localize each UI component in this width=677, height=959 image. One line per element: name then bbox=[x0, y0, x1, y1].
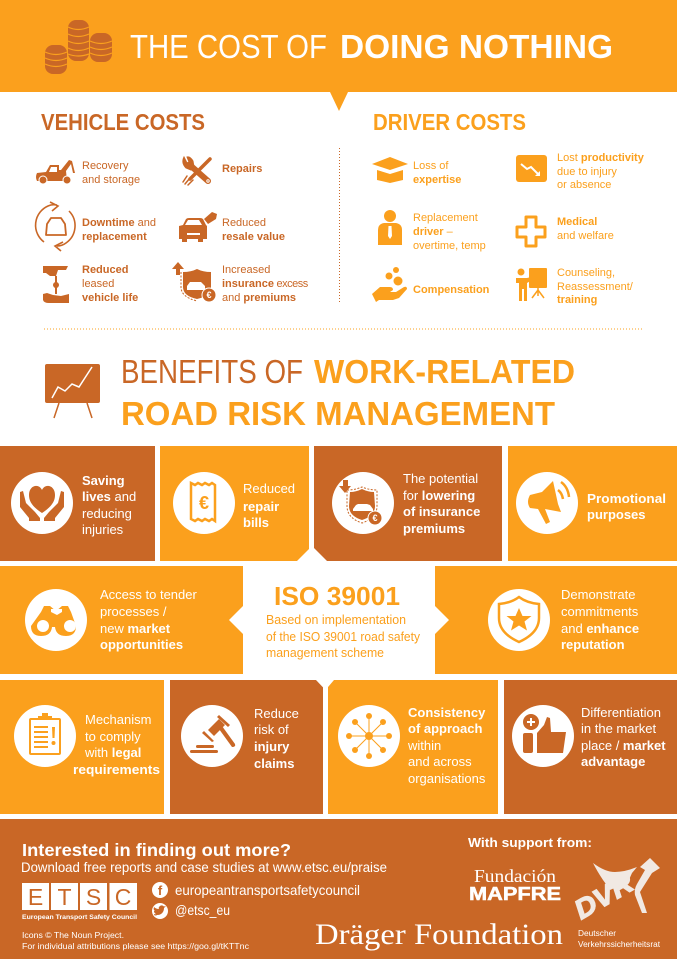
text: mechanism legal requirements: with bbox=[84, 745, 112, 760]
text: demonstrate commitments: reputation bbox=[561, 637, 625, 652]
logo: Fundación MAPFRE: MAPFRE bbox=[469, 884, 561, 904]
text: recovery and storage: Recovery bbox=[82, 160, 129, 172]
logo: ETSC: C bbox=[115, 884, 131, 910]
text: downtime and replacement: Downtime bbox=[82, 217, 135, 229]
logo: ETSC: E bbox=[28, 884, 43, 910]
text: demonstrate commitments: Demonstrate bbox=[561, 587, 635, 602]
text: medical and welfare: and welfare bbox=[557, 230, 614, 242]
text: replacement driver: overtime, temp bbox=[413, 240, 486, 252]
heading: benefits of work-related road risk management: BENEFITS OF bbox=[121, 353, 303, 390]
text: reduced leased vehicle life: Reduced bbox=[82, 264, 128, 276]
tile: demonstrate commitments bbox=[435, 566, 677, 674]
logo: Fundación MAPFRE: Fundación bbox=[474, 866, 556, 886]
text: demonstrate commitments: and bbox=[561, 621, 586, 636]
tile: differentiation market advantage bbox=[504, 680, 677, 814]
heading: benefits of work-related road risk management bbox=[121, 353, 575, 432]
tile: mechanism legal bbox=[0, 680, 164, 814]
text: potential lowering insurance premiums: for bbox=[403, 488, 422, 503]
icon: hand with coins bbox=[372, 267, 407, 302]
text: access to tender: processes / bbox=[100, 604, 167, 619]
panel: ISO 39001 bbox=[266, 581, 421, 660]
text: potential lowering insurance premiums: of insurance bbox=[403, 504, 480, 519]
text: icon attributions: Icons © The Noun Project. bbox=[22, 931, 124, 940]
text: based on implementation: of the ISO 39001 road safety bbox=[266, 630, 421, 644]
text: loss of expertise: expertise bbox=[413, 174, 461, 186]
logo: ETSC: S bbox=[86, 884, 101, 910]
text: facebook handle: europeantransportsafetycouncil bbox=[175, 882, 360, 898]
heading: benefits of work-related road risk management: WORK-RELATED bbox=[314, 353, 575, 390]
text: lost productivity: or absence bbox=[557, 179, 611, 191]
text: lost productivity: productivity bbox=[581, 152, 645, 164]
logo: DVR: Deutscher bbox=[578, 928, 616, 938]
text: promotional purposes: purposes bbox=[587, 507, 646, 522]
icon: facebook: f bbox=[158, 883, 163, 898]
text: lost productivity: due to injury bbox=[557, 166, 617, 178]
text: potential lowering insurance premiums: The potential bbox=[403, 471, 478, 486]
text: icon attributions: For individual attributions please see https://goo.gl/tKTTnc bbox=[22, 942, 249, 951]
icon: replacement cycle bbox=[36, 202, 75, 251]
text: lost productivity: Lost bbox=[557, 152, 581, 164]
text: counseling reassessment training: training bbox=[557, 294, 597, 306]
text: reduced leased vehicle life: leased bbox=[82, 278, 114, 290]
logo: DVR: DVR bbox=[569, 867, 639, 925]
text: replacement driver: – bbox=[444, 226, 454, 238]
text: replacement driver: Replacement bbox=[413, 212, 478, 224]
icon: binoculars bbox=[25, 589, 87, 651]
icon: falling chart bbox=[516, 155, 547, 182]
text: demonstrate commitments: commitments bbox=[561, 604, 639, 619]
tile: reduce risk of injury claims bbox=[170, 680, 323, 814]
icon: medical cross bbox=[517, 217, 545, 246]
heading: driver costs: DRIVER COSTS bbox=[373, 109, 526, 135]
icon: thumbs up bbox=[512, 705, 574, 767]
icon: clipboard bbox=[14, 705, 76, 767]
text: saving lives: Saving bbox=[82, 473, 125, 488]
icon: facebook bbox=[152, 882, 168, 898]
text: reduce risk of injury claims: injury bbox=[254, 739, 290, 754]
text: counseling reassessment training: Reassessment/ bbox=[557, 281, 634, 293]
text: with support from: With support from: bbox=[468, 835, 592, 850]
panel: vehicle costs bbox=[36, 109, 309, 304]
heading: interested in finding out more: Interested in finding out more? bbox=[22, 840, 291, 860]
text: increased insurance excess and premiums: excess bbox=[274, 278, 309, 290]
title: DOING NOTHING bbox=[340, 28, 613, 65]
text: replacement driver: driver bbox=[413, 226, 444, 238]
icon: star shield bbox=[488, 589, 550, 651]
text: access to tender: new bbox=[100, 621, 127, 636]
text: twitter handle: @etsc_eu bbox=[175, 902, 230, 918]
text: recovery and storage: and storage bbox=[82, 174, 140, 186]
text: saving lives: and bbox=[111, 489, 136, 504]
text: increased insurance excess and premiums: premiums bbox=[243, 292, 296, 304]
text: based on implementation: management scheme bbox=[266, 646, 384, 660]
icon: presenter at board bbox=[516, 268, 547, 301]
logo: Dräger Foundation: Dräger Foundation bbox=[315, 918, 563, 951]
text: icon attributions bbox=[22, 931, 249, 951]
icon: tow truck bbox=[36, 160, 75, 184]
logo: ETSC: T bbox=[57, 884, 72, 910]
text: reduced repair bills: bills bbox=[243, 515, 269, 530]
icon: network hub bbox=[338, 705, 400, 767]
text: access to tender: Access to tender bbox=[100, 587, 197, 602]
icon: replacement driver bbox=[378, 210, 402, 245]
text: downtime and replacement: and bbox=[135, 217, 156, 229]
text: potential lowering insurance premiums: premiums bbox=[403, 521, 465, 536]
text: consistency of approach: within bbox=[407, 738, 441, 753]
text: consistency of approach: organisations bbox=[408, 771, 486, 786]
icon: wrench and screwdriver bbox=[183, 157, 210, 185]
text: promotional purposes: Promotional bbox=[587, 491, 666, 506]
text: based on implementation bbox=[266, 613, 421, 660]
text: increased insurance excess and premiums: and bbox=[222, 292, 243, 304]
icon: car with price tag bbox=[179, 212, 217, 242]
icon: euro receipt: € bbox=[199, 493, 209, 513]
text: differentiation market advantage: place / bbox=[581, 738, 623, 753]
text: increased insurance excess and premiums: insurance bbox=[222, 278, 274, 290]
text: reduced leased vehicle life: vehicle life bbox=[82, 292, 138, 304]
tile: lowering insurance premiums bbox=[314, 446, 502, 561]
icon: coin stacks bbox=[45, 20, 112, 74]
text: reduce risk of injury claims: claims bbox=[254, 756, 294, 771]
icon: insurance up: € bbox=[206, 290, 212, 300]
text: differentiation market advantage: market bbox=[623, 738, 666, 753]
icon: hands holding heart bbox=[11, 472, 73, 534]
text: reduced repair bills: Reduced bbox=[243, 481, 295, 496]
tile: saving lives bbox=[0, 446, 155, 561]
icon: graduation cap bbox=[372, 157, 408, 183]
icon: insurance up bbox=[172, 262, 216, 302]
heading: vehicle costs: VEHICLE COSTS bbox=[41, 109, 205, 135]
icon: megaphone bbox=[516, 472, 578, 534]
title: THE COST OF bbox=[130, 28, 327, 65]
icon: hand with key bbox=[43, 266, 69, 303]
logo: DVR bbox=[569, 858, 661, 949]
icon: insurance down: € bbox=[372, 513, 378, 523]
header banner bbox=[0, 0, 677, 111]
text: mechanism legal requirements: Mechanism bbox=[85, 712, 151, 727]
tile: promotional purposes bbox=[508, 446, 677, 561]
text: differentiation market advantage: advantage bbox=[581, 754, 645, 769]
text: consistency of approach: and across bbox=[408, 754, 472, 769]
tile: access to tender processes bbox=[0, 566, 243, 674]
text: download free reports: Download free reports and case studies at www.etsc.eu/praise bbox=[21, 859, 387, 875]
text: demonstrate commitments: enhance bbox=[586, 621, 639, 636]
text: consistency of approach: of approach bbox=[408, 721, 482, 736]
logo: DVR: Verkehrssicherheitsrat bbox=[578, 939, 661, 949]
logo: ETSC bbox=[22, 883, 137, 921]
text: mechanism legal requirements: requirements bbox=[73, 762, 160, 777]
text: differentiation market advantage: in the market bbox=[581, 721, 657, 736]
tile: reduced repair bills bbox=[160, 446, 309, 561]
footer panel bbox=[0, 819, 677, 959]
text: mechanism legal requirements: to comply bbox=[85, 729, 141, 744]
text: loss of expertise: Loss of bbox=[413, 160, 449, 172]
text: repairs: Repairs bbox=[222, 163, 262, 175]
text: mechanism legal requirements: legal bbox=[112, 745, 141, 760]
panel: driver costs bbox=[372, 109, 645, 306]
logo: Fundación MAPFRE bbox=[469, 866, 561, 904]
tile: consistency of approach bbox=[328, 680, 498, 814]
text: saving lives: reducing bbox=[82, 506, 132, 521]
heading: benefits of work-related road risk management: ROAD RISK MANAGEMENT bbox=[121, 395, 555, 432]
text: differentiation market advantage: Differentiation bbox=[581, 705, 661, 720]
text: compensation: Compensation bbox=[413, 284, 490, 296]
icon: insurance down bbox=[332, 472, 394, 534]
icon: presentation board with rising chart bbox=[45, 364, 100, 418]
text: based on implementation: Based on implementation bbox=[266, 613, 406, 627]
text: medical and welfare: Medical bbox=[557, 216, 597, 228]
title bbox=[130, 28, 613, 65]
text: reduced repair bills: repair bbox=[243, 499, 279, 514]
icon: twitter bbox=[152, 903, 168, 919]
text: consistency of approach: Consistency bbox=[408, 705, 486, 720]
heading: ISO 39001: ISO 39001 bbox=[274, 581, 400, 611]
icon: gavel bbox=[181, 705, 243, 767]
text: access to tender: opportunities bbox=[100, 637, 183, 652]
text: reduce risk of injury claims: risk of bbox=[254, 722, 289, 737]
text: access to tender: market bbox=[127, 621, 171, 636]
icon: euro receipt bbox=[173, 472, 235, 534]
text: counseling reassessment training: Counseling, bbox=[557, 267, 615, 279]
text: potential lowering insurance premiums: lowering bbox=[422, 488, 475, 503]
text: saving lives: lives bbox=[82, 489, 111, 504]
text: saving lives: injuries bbox=[82, 522, 124, 537]
text: increased insurance excess and premiums: Increased bbox=[222, 264, 270, 276]
text: reduced resale value: resale value bbox=[222, 231, 285, 243]
text: reduce risk of injury claims: Reduce bbox=[254, 706, 299, 721]
text: downtime and replacement: replacement bbox=[82, 231, 147, 243]
text: reduced resale value: Reduced bbox=[222, 217, 266, 229]
logo: ETSC: European Transport Safety Council bbox=[22, 914, 137, 921]
